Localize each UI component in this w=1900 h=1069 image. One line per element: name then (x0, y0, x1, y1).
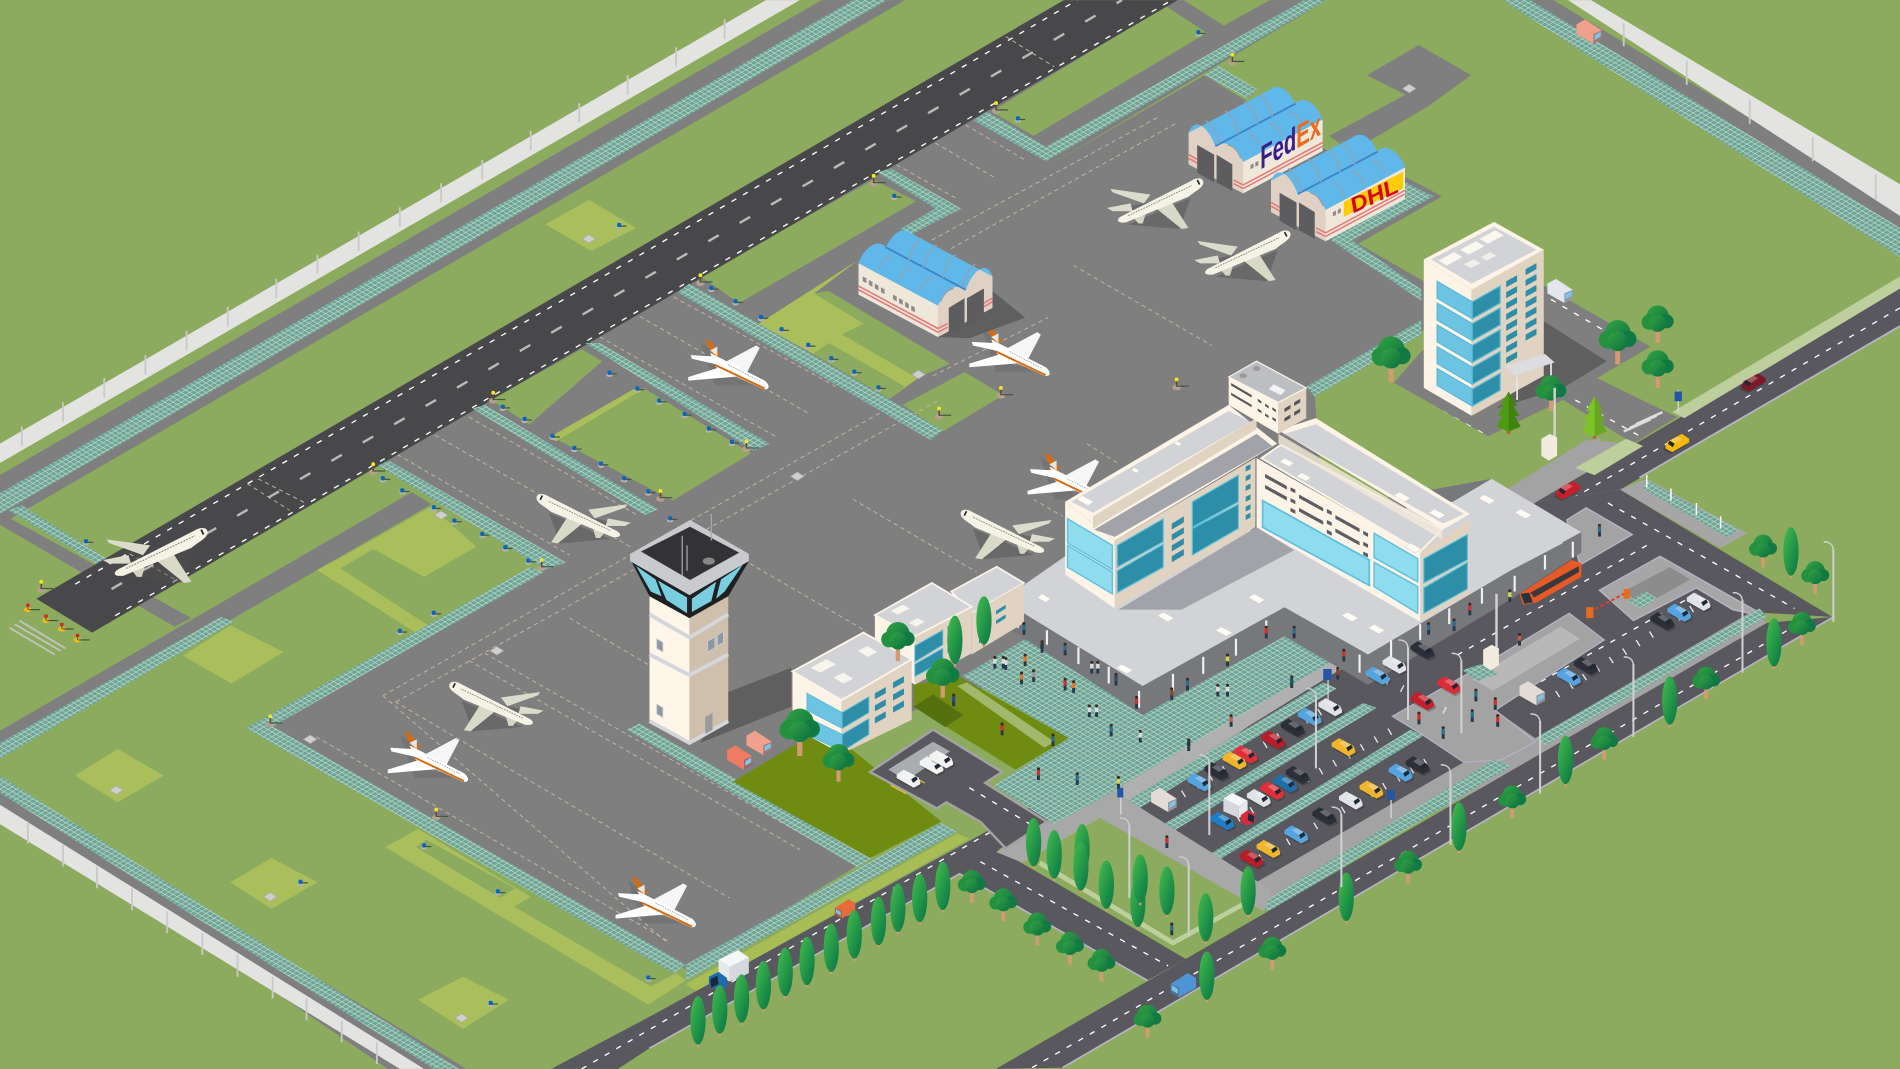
tree shadow and tower shadow (700, 668, 791, 743)
road west (551, 797, 1186, 1069)
crosswalk north (1624, 412, 1662, 432)
hangar FedEx (1189, 87, 1323, 193)
plane cream near hangars 2 (1194, 231, 1291, 281)
office shadow (1496, 321, 1607, 408)
annex far (951, 567, 1024, 654)
tall flag pole and kiosk (1483, 388, 1557, 670)
olive verge below apron (686, 834, 969, 991)
apron dashed markings (316, 116, 1212, 944)
office building (1424, 222, 1555, 416)
office plot (1393, 285, 1677, 444)
island with barrier (1586, 556, 1767, 621)
grass fields inside apron (491, 0, 1270, 501)
road north-east (1536, 289, 1900, 502)
fence posts, north-west (22, 20, 725, 446)
plot dashes (1396, 299, 1666, 451)
safety strips around apron (246, 0, 1433, 980)
lawn olive 2 (914, 676, 1069, 770)
light grass patches (75, 200, 686, 1029)
light path to road (1575, 276, 1900, 475)
people (952, 524, 1601, 935)
plane cream lower (449, 682, 543, 731)
hangar shadow (938, 291, 1025, 338)
central island (1392, 613, 1604, 762)
cypress trees (690, 527, 1799, 1047)
plane orange 1 (688, 339, 771, 389)
hangar DHL: DHL (1346, 174, 1402, 218)
road south (996, 617, 1833, 1069)
annex near (792, 633, 912, 754)
pine trees (1496, 392, 1607, 439)
annex middle (875, 583, 972, 685)
hangar field (759, 259, 950, 399)
lawn olive (733, 727, 942, 858)
hangar FedEx: FedEx (1260, 106, 1321, 178)
vans and trucks (709, 20, 1602, 997)
plane cream centre (537, 494, 631, 543)
plane cream near hangars 1 (1107, 178, 1203, 229)
plane cream at runway threshold (103, 528, 208, 583)
approach lights and stripes (10, 604, 90, 654)
plane cream by terminal (961, 510, 1055, 559)
perimeter fence and road, north-east (1503, 0, 1900, 257)
hangar blue unmarked (859, 230, 992, 337)
sidewalk pad by terminal (1567, 508, 1632, 565)
terminal roof tower (1229, 361, 1306, 434)
perimeter fence and road, south-west (0, 776, 467, 1069)
hangar DHL (1271, 135, 1405, 241)
sidewalk along plaza (1097, 648, 1355, 810)
plane orange 4 (616, 877, 698, 927)
perimeter fence and road, north-west (0, 0, 905, 525)
pad marker (1403, 84, 1416, 93)
control tower (630, 514, 749, 743)
plane orange 2 (969, 326, 1052, 376)
terminal canopy (1002, 479, 1581, 715)
terminal left wing (1065, 405, 1277, 608)
road lane dashes front (1454, 503, 1795, 685)
sidewalk near road (1506, 440, 1633, 502)
plaza (962, 630, 1337, 824)
sidewalk by garden (996, 788, 1272, 911)
small car park (870, 730, 1047, 848)
front forecourt base (1097, 436, 1767, 907)
terminal right wing (1257, 418, 1470, 622)
plane orange 3 (388, 732, 470, 782)
lawn by terminal (1324, 383, 1633, 502)
parking bay lines (1169, 606, 1696, 858)
runway lights: blue (83, 30, 1206, 1007)
street lamps (1120, 542, 1833, 937)
sidewalk panel and fence south-east (1620, 475, 1747, 548)
light grass stripe (549, 389, 643, 441)
apron pad markers (110, 235, 925, 1022)
garden (1023, 818, 1264, 959)
taxiway bands west (0, 492, 431, 759)
safety strips west (0, 505, 234, 759)
hangar windows (863, 276, 915, 312)
front asphalt and car parks (1127, 490, 1832, 883)
runway lights: yellow (37, 53, 1244, 820)
bus (1520, 560, 1581, 605)
round trees (780, 305, 1829, 1037)
cargo pad and service road (1329, 45, 1471, 152)
runway (36, 0, 1178, 633)
plane orange 5 (1028, 453, 1110, 503)
parking strip dividers (1114, 608, 1767, 911)
main apron (262, 0, 1442, 970)
planes on apron and runway (103, 528, 208, 583)
parking signs (1117, 390, 1682, 818)
cars (897, 373, 1765, 870)
